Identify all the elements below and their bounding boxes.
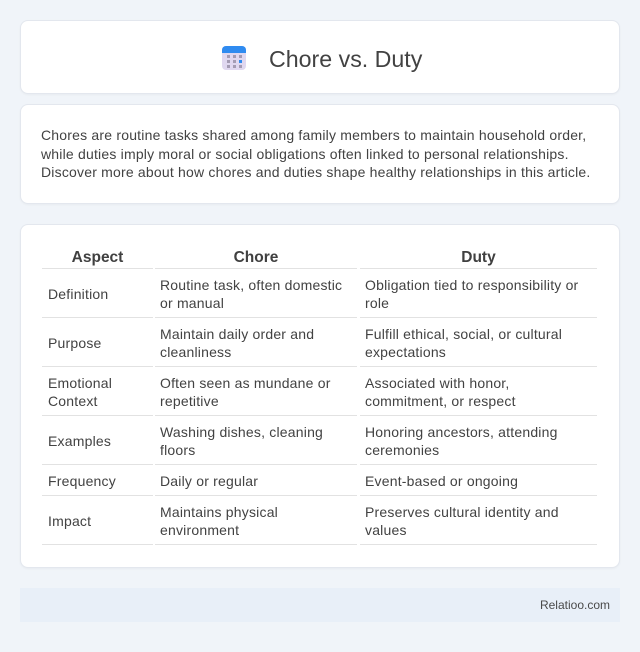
comparison table: Washing dishes, cleaning [160, 424, 323, 440]
row: Emotional Context: Emotional [48, 375, 112, 391]
comparison table: Honoring ancestors, attending [365, 424, 558, 440]
header: Duty: Duty [461, 249, 496, 266]
footer bar [20, 588, 620, 622]
comparison table: Fulfill ethical, social, or cultural [365, 326, 562, 342]
panel: title card [20, 20, 620, 94]
intro text: while duties imply moral or social obligations often linked to personal relationships. [41, 146, 569, 162]
comparison table: role [365, 295, 389, 311]
row: Emotional Context: Context [48, 393, 98, 409]
comparison table: commitment, or respect [365, 393, 516, 409]
comparison table: Obligation tied to responsibility or [365, 277, 578, 293]
intro text [41, 127, 590, 180]
comparison table: Often seen as mundane or [160, 375, 331, 391]
comparison table: environment [160, 522, 239, 538]
row: Frequency: Frequency [48, 473, 116, 489]
comparison table: cleanliness [160, 344, 231, 360]
panel: comparison table background [20, 224, 620, 568]
icon: calendar [222, 46, 246, 70]
comparison table: Daily or regular [160, 473, 258, 489]
header: Aspect: Aspect [72, 249, 123, 266]
comparison table: repetitive [160, 393, 219, 409]
comparison table: ceremonies [365, 442, 439, 458]
comparison table: Event-based or ongoing [365, 473, 518, 489]
comparison table: Maintain daily order and [160, 326, 314, 342]
header: Chore: Chore [234, 249, 278, 266]
comparison table: Associated with honor, [365, 375, 509, 391]
intro text: Chores are routine tasks shared among family members to maintain household order, [41, 127, 586, 143]
comparison table: Preserves cultural identity and [365, 504, 559, 520]
row: Examples: Examples [48, 433, 111, 449]
row: Purpose: Purpose [48, 335, 102, 351]
comparison table: or manual [160, 295, 224, 311]
row: Emotional Context [48, 375, 112, 409]
comparison table: floors [160, 442, 195, 458]
intro text: Discover more about how chores and duties shape healthy relationships in this article. [41, 164, 590, 180]
comparison table: Routine task, often domestic [160, 277, 342, 293]
title: Chore vs. Duty [269, 46, 422, 72]
comparison table: Maintains physical [160, 504, 278, 520]
row: Definition: Definition [48, 286, 108, 302]
panel: introduction [20, 104, 620, 204]
footer credit: Relatioo.com [540, 598, 610, 612]
row: Impact: Impact [48, 513, 91, 529]
comparison table: expectations [365, 344, 446, 360]
comparison table: values [365, 522, 407, 538]
